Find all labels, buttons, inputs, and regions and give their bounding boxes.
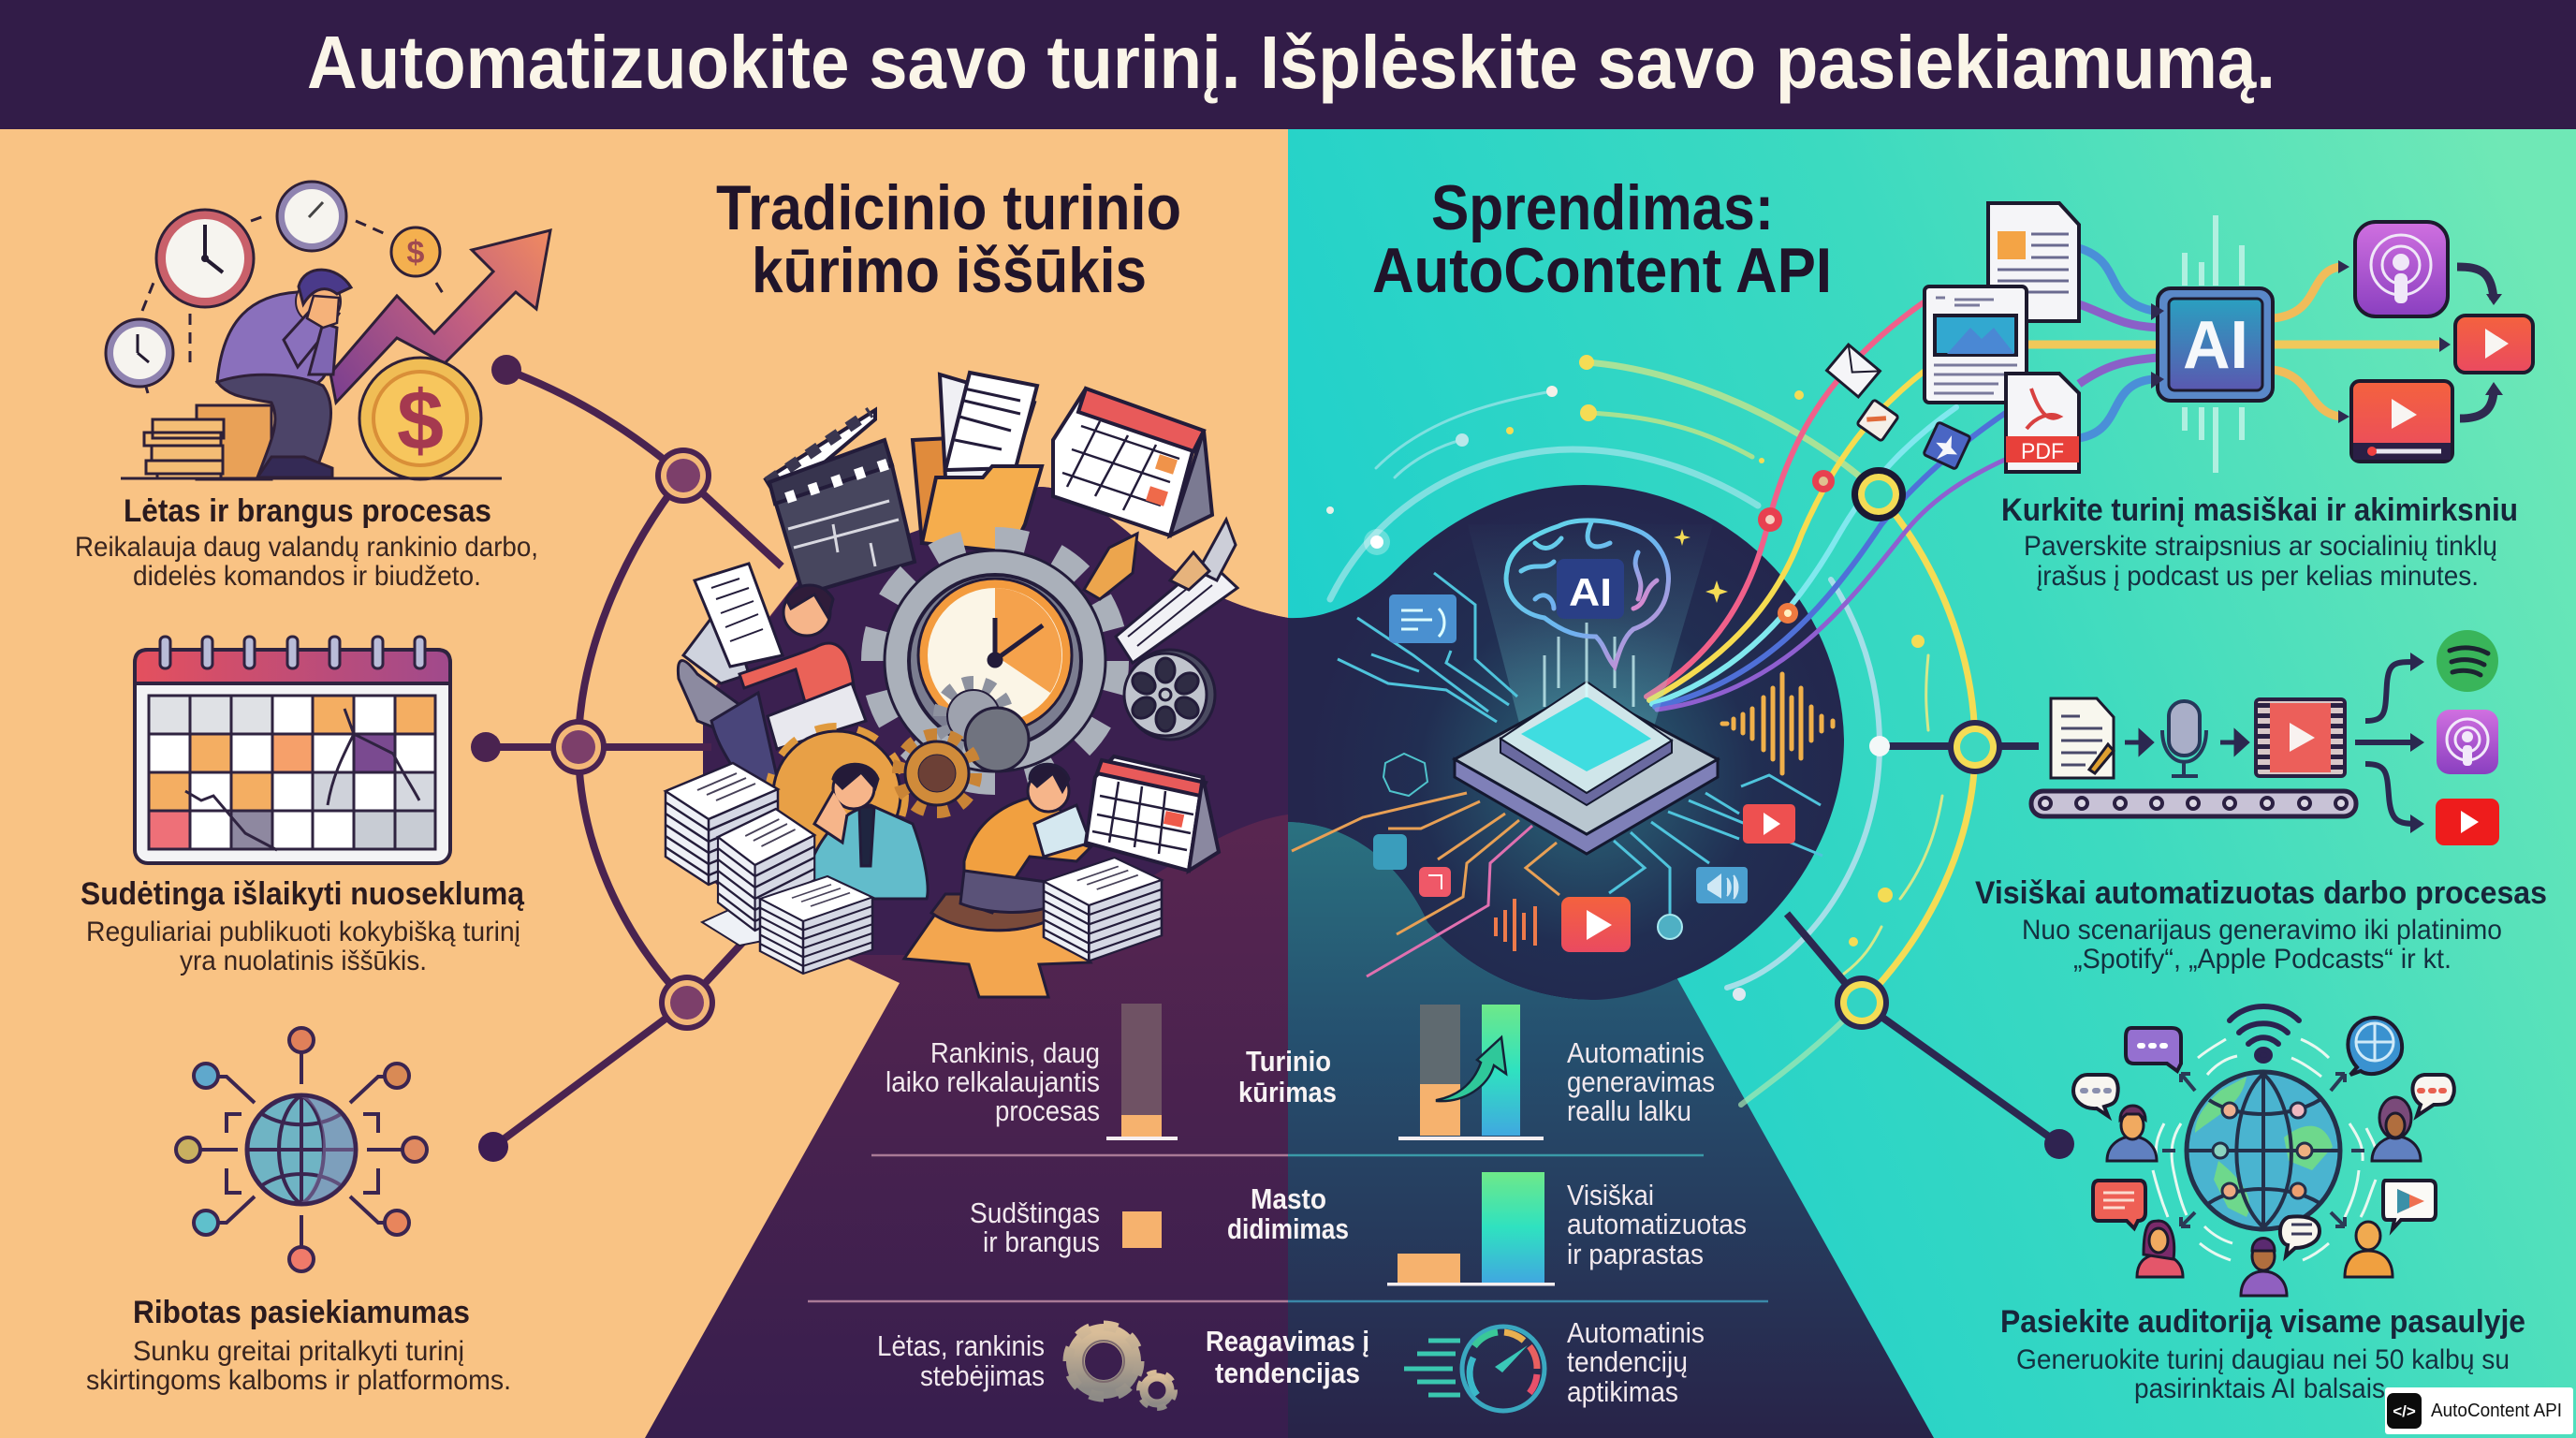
sub: paper roll and pencil bbox=[1084, 520, 1237, 663]
text: automated scaling: ir paprastas bbox=[1567, 1238, 1704, 1270]
text: traditional scaling bbox=[970, 1196, 1100, 1258]
sub: outline icon bbox=[1383, 754, 1427, 796]
sub: clapperboard bbox=[766, 410, 915, 594]
sub: blue tile bbox=[1373, 834, 1407, 870]
sub: arrow to microphone bbox=[2125, 733, 2151, 752]
sub: globe bbox=[2187, 1072, 2340, 1229]
heading: left panel title bbox=[716, 172, 1181, 306]
icon: envelope tile bbox=[1827, 345, 1880, 397]
sub: orange gears bbox=[777, 735, 897, 855]
panel: right teal background bbox=[1288, 129, 2576, 1438]
node: right lower end dot bbox=[2044, 1129, 2074, 1159]
node: left upper end dot bbox=[491, 355, 521, 385]
text: traditional scaling: Sudštingas bbox=[970, 1196, 1100, 1229]
sub: arrowheads bbox=[2410, 653, 2424, 833]
text: automated scaling: automatizuotas bbox=[1567, 1208, 1747, 1240]
icon: image tile bbox=[1857, 400, 1898, 441]
icon: globe with connected nodes bbox=[176, 1028, 427, 1271]
text: centre label creation: kūrimas bbox=[1238, 1076, 1337, 1108]
sub: grey gear with clock bbox=[875, 541, 1115, 781]
network: left connector lines bbox=[486, 370, 782, 1147]
sub: flow lines bbox=[2027, 248, 2494, 438]
text: centre label trends: tendencijas bbox=[1215, 1357, 1360, 1389]
badge: AutoContent API: </> bbox=[2393, 1402, 2416, 1420]
title: Automatizuokite savo turinį. Išplėskite savo pasiekiamumą. bbox=[307, 21, 2276, 104]
text: automated scaling bbox=[1567, 1179, 1747, 1270]
sub: video player tile bbox=[2351, 381, 2452, 462]
sub: man in orange with papers bbox=[960, 764, 1090, 913]
text: automated trends bbox=[1567, 1316, 1705, 1408]
text: traditional trends: stebėjimas bbox=[920, 1359, 1045, 1392]
text: automated creation: reallu lalku bbox=[1567, 1094, 1691, 1127]
illustration: documents to AI to outputs bbox=[1925, 203, 2533, 473]
badge: AutoContent API bbox=[2385, 1387, 2573, 1434]
connector: right lower line bbox=[1787, 914, 2059, 1144]
connector: right middle line bbox=[1880, 742, 2039, 750]
sub: blue audio card bbox=[1389, 594, 1456, 643]
sub: AI processor tile bbox=[2158, 288, 2273, 401]
shape: dark navy centre area bbox=[1288, 822, 1934, 1438]
sub: microphone bbox=[2162, 701, 2206, 776]
heading: right panel title bbox=[1372, 172, 1832, 306]
node: right lower ring bbox=[1835, 976, 1889, 1030]
sub: small grey gears bbox=[940, 682, 1007, 750]
text: automated trends: aptikimas bbox=[1567, 1375, 1678, 1408]
text: traditional creation: Rankinis, daug bbox=[930, 1036, 1100, 1069]
illustration: stressed person with clocks and rising costs: $ bbox=[397, 374, 444, 468]
node: red flow markers bbox=[1758, 470, 1835, 624]
sub: pink note tile bbox=[1419, 867, 1451, 897]
node: right middle ring bbox=[1948, 720, 2002, 774]
sub: circuit traces bbox=[1292, 573, 1822, 976]
badge: AutoContent API: AutoContent API bbox=[2431, 1401, 2562, 1421]
illustration: stressed person with clocks and rising costs: $ bbox=[407, 235, 425, 271]
sub: web page document bbox=[1925, 286, 2027, 403]
text: centre label trends: Reagavimas į bbox=[1206, 1325, 1369, 1357]
sub: small orange soundwave bbox=[1496, 899, 1535, 951]
sub: big play tile bbox=[1561, 897, 1631, 952]
illustration: stressed person with clocks and rising costs bbox=[106, 182, 550, 479]
icon: slow gears bbox=[1068, 1326, 1175, 1408]
sub: bubble details bbox=[2083, 1046, 2444, 1234]
icon: star tile bbox=[1924, 422, 1970, 469]
text: limited reach line 2: skirtingoms kalboms ir platformoms. bbox=[86, 1365, 511, 1396]
heading: right panel title: Sprendimas: bbox=[1431, 172, 1774, 243]
text: traditional trends: Lėtas, rankinis bbox=[877, 1329, 1045, 1362]
text: traditional creation bbox=[886, 1036, 1100, 1127]
shape: dark purple centre area bbox=[645, 487, 1288, 1438]
network: right decorative arcs bbox=[1330, 362, 1975, 1105]
sub: speaker card bbox=[1696, 867, 1748, 903]
sub: orange soundwave bbox=[1722, 674, 1833, 773]
heading: left panel title: Tradicinio turinio bbox=[716, 172, 1181, 243]
text: traditional creation: laiko relkalaujantis bbox=[886, 1065, 1100, 1098]
illustration: global audience around a globe bbox=[2073, 1006, 2454, 1296]
illustration: automated workflow pipeline bbox=[2031, 630, 2499, 845]
header band bbox=[0, 0, 2576, 129]
node: white middle dot bbox=[1869, 736, 1890, 756]
text: automated creation: Automatinis bbox=[1567, 1036, 1705, 1069]
chart: scale traditional square bbox=[1122, 1211, 1162, 1248]
text: mass content line 2: įrašus į podcast us per kelias minutes. bbox=[2037, 561, 2479, 592]
text: centre label scaling: Masto bbox=[1251, 1182, 1326, 1215]
sub: AI tag on brain bbox=[1557, 559, 1624, 619]
text: traditional scaling: ir brangus bbox=[983, 1225, 1100, 1258]
text: centre label creation: Turinio bbox=[1246, 1045, 1331, 1078]
sub: chip body bbox=[1455, 759, 1718, 854]
sub: connector dashes and arrows bbox=[2162, 1074, 2364, 1226]
sub: globe nodes bbox=[2213, 1103, 2312, 1198]
sub: podcast tile bbox=[2355, 222, 2448, 316]
text: limited reach line 1: Sunku greitai pritalkyti turinį bbox=[133, 1336, 464, 1367]
heading: mass content creation: Kurkite turinį masiškai ir akimirksniu bbox=[2001, 492, 2518, 528]
heading: consistency: Sudėtinga išlaikyti nuoseklumą bbox=[80, 876, 525, 912]
heading: right panel title: AutoContent API bbox=[1372, 235, 1832, 306]
heading: fully automated workflow: Visiškai automatizuotas darbo procesas bbox=[1975, 875, 2547, 911]
text: global audience line 2: pasirinktais AI balsais bbox=[2134, 1373, 2385, 1404]
node: left lower end dot bbox=[478, 1132, 508, 1162]
sub: distribution arrows bbox=[2355, 662, 2418, 824]
node: left middle ring bbox=[550, 719, 607, 775]
sub: conveyor belt bbox=[2031, 791, 2356, 816]
sub: script document bbox=[2051, 698, 2114, 778]
sub: hologram beam bbox=[1468, 524, 1713, 730]
decor: small glowing dots bbox=[1326, 355, 1925, 1001]
sub: film strip bbox=[2256, 699, 2345, 776]
text: global audience line 1: Generuokite turinį daugiau nei 50 kalbų su bbox=[2016, 1344, 2510, 1375]
chart: scale bars bbox=[1387, 1172, 1555, 1286]
sub: paper stacks bbox=[666, 763, 1162, 974]
sub: arrow to film bbox=[2220, 733, 2247, 752]
sub: film reel bbox=[1124, 650, 1215, 740]
table: comparison dividers bbox=[808, 1155, 1768, 1301]
text: consistency line 1: Reguliariai publikuoti kokybišką turinį bbox=[86, 917, 520, 947]
sub: podcasts logo bbox=[2437, 710, 2498, 774]
sub: network symbol bbox=[1658, 915, 1682, 939]
text: automated trends: tendencijų bbox=[1567, 1345, 1688, 1378]
panel: left orange background bbox=[0, 129, 1288, 1438]
sub: AI processor tile: AI bbox=[2183, 308, 2248, 383]
sub: article document bbox=[1988, 203, 2079, 321]
sub: people avatars bbox=[2107, 1097, 2421, 1296]
sub: loose paper bbox=[702, 899, 763, 946]
sub: man in blue at desk bbox=[808, 764, 928, 899]
text: traditional trends bbox=[877, 1329, 1045, 1392]
text: consistency line 2: yra nuolatinis iššūkis. bbox=[180, 946, 427, 976]
text: traditional creation: procesas bbox=[995, 1094, 1100, 1127]
text: mass content line 1: Paverskite straipsnius ar socialinių tinklų bbox=[2024, 531, 2497, 562]
node: left upper ring bbox=[655, 448, 711, 504]
sub: red play tile bbox=[2455, 315, 2533, 373]
sub: YouTube logo bbox=[2436, 799, 2499, 845]
shape: navy circle behind chip bbox=[1288, 485, 1844, 1000]
illustration: AI chip with brain hologram: AI bbox=[1569, 570, 1612, 614]
heading: left panel title: kūrimo iššūkis bbox=[752, 235, 1147, 306]
sub: folder with document bbox=[913, 373, 1042, 552]
icon: trend speedometer bbox=[1404, 1327, 1544, 1411]
text: automated scaling: Visiškai bbox=[1567, 1179, 1654, 1211]
sub: desk calendar top right bbox=[1053, 389, 1212, 536]
text: workflow line 2: „Spotify“, „Apple Podcasts“ ir kt. bbox=[2073, 944, 2452, 975]
streams: coloured data flows from chip bbox=[1647, 302, 2007, 710]
sub: Wi-Fi signal bbox=[2230, 1006, 2299, 1061]
heading: limited reach: Ribotas pasiekiamumas bbox=[133, 1295, 470, 1330]
sub: arrowheads bbox=[2151, 260, 2503, 423]
sub: PDF document bbox=[2006, 374, 2079, 472]
heading: slow and expensive: Lėtas ir brangus procesas bbox=[124, 493, 491, 529]
chart: AutoContent creation bars bbox=[1398, 1005, 1544, 1140]
sub: red play tile bbox=[1743, 804, 1795, 844]
node: right upper ring bbox=[1852, 467, 1906, 521]
text: slow and expensive line 2: didelės komandos ir biudžeto. bbox=[133, 561, 481, 592]
text: workflow line 1: Nuo scenarijaus generavimo iki platinimo bbox=[2022, 915, 2502, 946]
sub: equaliser bars bbox=[2185, 215, 2242, 473]
text: automated creation bbox=[1567, 1036, 1715, 1127]
sub: small desk calendar bbox=[1086, 756, 1219, 871]
text: automated creation: generavimas bbox=[1567, 1065, 1715, 1098]
node: left middle end dot bbox=[471, 732, 501, 762]
sub: motion arcs bbox=[2153, 1039, 2376, 1260]
illustration: broken calendar bbox=[135, 637, 450, 863]
text: centre label trends bbox=[1206, 1325, 1369, 1389]
illustration: AI chip with brain hologram bbox=[1292, 521, 1833, 976]
node: left lower ring bbox=[659, 975, 715, 1031]
text: centre label creation bbox=[1238, 1045, 1337, 1108]
heading: global audience: Pasiekite auditoriją visame pasaulyje bbox=[2000, 1304, 2525, 1340]
sub: star sparkles bbox=[1674, 529, 1728, 603]
sub: Spotify logo bbox=[2437, 630, 2498, 692]
chart: traditional content creation bar bbox=[1106, 1004, 1178, 1140]
sub: PDF document: PDF bbox=[2021, 439, 2064, 464]
text: centre label scaling: didimimas bbox=[1227, 1212, 1349, 1245]
sub: speech bubbles bbox=[2073, 1018, 2454, 1256]
sub: brain bbox=[1506, 521, 1669, 667]
text: centre label scaling bbox=[1227, 1182, 1349, 1245]
sub: globe continents bbox=[2195, 1077, 2333, 1217]
text: slow and expensive line 1: Reikalauja daug valandų rankinio darbo, bbox=[75, 532, 538, 563]
sub: globe grid bbox=[2188, 1072, 2339, 1229]
text: automated trends: Automatinis bbox=[1567, 1316, 1705, 1349]
illustration: central cluster of gears, papers and overworked people bbox=[666, 373, 1237, 997]
shape: dark cluster shade bbox=[703, 487, 1288, 955]
sub: woman reading papers bbox=[678, 564, 866, 805]
